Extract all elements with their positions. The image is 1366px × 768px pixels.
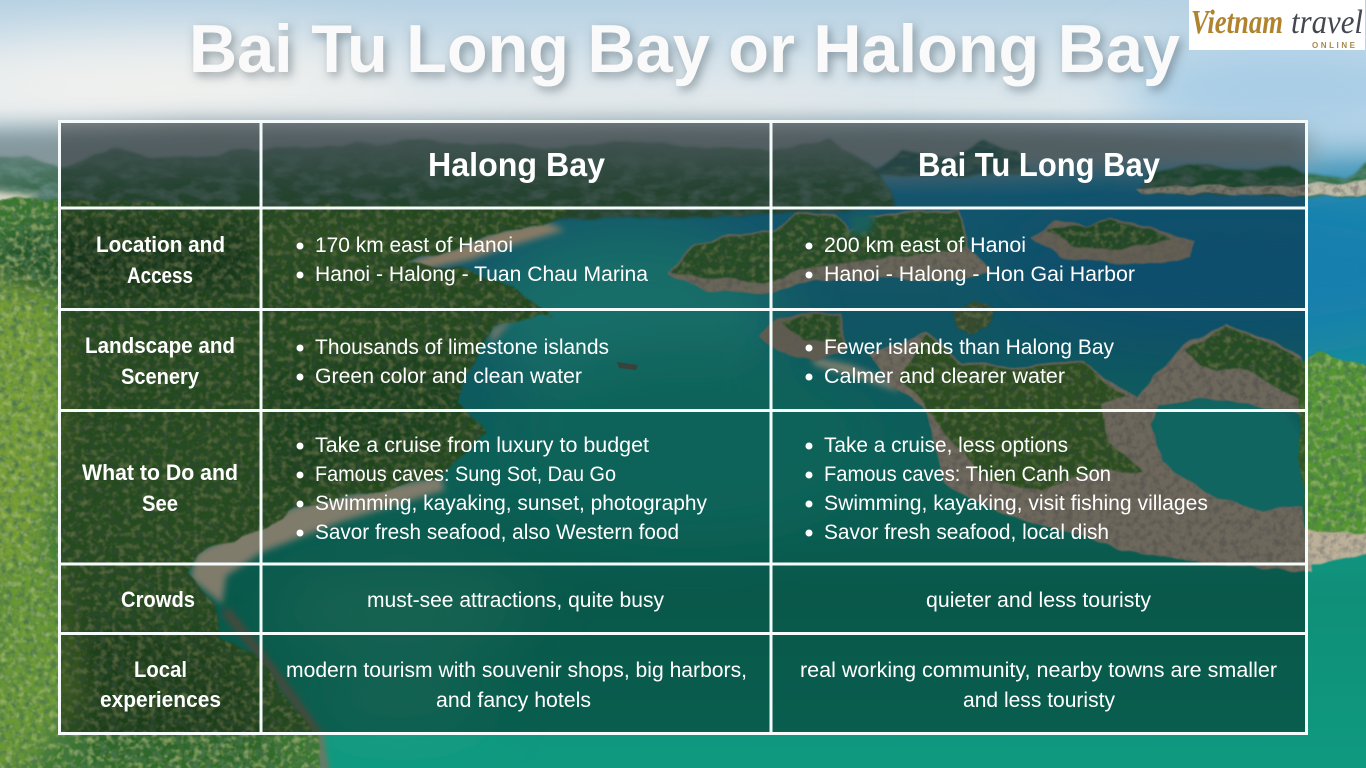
row: Local experiences: experiences [100,687,221,712]
far mountains [0,138,896,218]
table panel overlay [58,120,1308,735]
column heading: Bai Tu Long Bay: Bai Tu Long Bay [918,146,1161,183]
central islands: forest tops [672,212,1172,342]
row: Local experiences: and fancy hotels [436,689,591,712]
beaches [190,222,900,604]
row: Location and Access [96,232,1135,288]
row: Local experiences [100,657,1277,712]
row: Crowds: Crowds [121,587,195,612]
row: Local experiences: Local [134,657,187,682]
row: Location and Access: 170 km east of Hanoi [315,234,513,257]
row: What to Do and See: Swimming, kayaking, visit fishing villages [824,492,1208,515]
row: Location and Access: 200 km east of Hanoi [824,234,1026,257]
logo: Vietnam travel online: Vietnam [1191,4,1283,41]
distant hazy ridge [0,122,1310,190]
row: Crowds: quieter and less touristy [926,589,1151,612]
row: What to Do and See: Famous caves: Thien Canh Son [824,463,1111,486]
small bay inside the central island [850,213,875,236]
row: Landscape and Scenery: Scenery [121,364,200,389]
logo: Vietnam travel online [1189,0,1365,50]
lagoon [1150,395,1310,515]
row: Landscape and Scenery: Thousands of limestone islands [315,336,609,359]
row: Location and Access: Hanoi - Halong - Hon Gai Harbor [824,263,1135,286]
row: What to Do and See: Savor fresh seafood, local dish [824,521,1109,544]
row: Landscape and Scenery: Fewer islands than Halong Bay [824,336,1114,359]
row: Local experiences: and less touristy [963,689,1115,712]
logo: Vietnam travel online: ONLINE [1312,41,1356,50]
row: Location and Access: Access [127,263,193,288]
row: Location and Access: Hanoi - Halong - Tuan Chau Marina [315,263,648,286]
row: What to Do and See: Take a cruise from luxury to budget [315,434,649,457]
rocky arc island with lagoon [866,323,1312,572]
boats [617,362,638,370]
right headland [1298,353,1366,558]
distant islands in the header [870,143,1366,196]
column heading: Halong Bay: Halong Bay [428,146,606,183]
row: What to Do and See: Famous caves: Sung Sot, Dau Go [315,463,616,486]
row: What to Do and See: Savor fresh seafood, also Western food [315,521,679,544]
main left headland with tonal patches [0,190,580,768]
title: Bai Tu Long Bay or Halong Bay [189,11,1180,87]
row: What to Do and See: See [142,491,178,516]
row: Location and Access: Location and [96,232,225,257]
row: What to Do and See: Take a cruise, less options [824,434,1068,457]
row: Landscape and Scenery: Green color and clean water [315,365,582,388]
river at far left [0,190,40,228]
rocky shoreline lower left [225,610,325,768]
row: Landscape and Scenery [85,333,1114,389]
row: What to Do and See: What to Do and [82,460,238,485]
row: Local experiences: real working community, nearby towns are smaller [800,659,1277,682]
central islands: rock bases [668,210,1193,360]
row: What to Do and See [82,434,1208,544]
row: Crowds: must-see attractions, quite busy [367,589,664,612]
row: Local experiences: modern tourism with souvenir shops, big harbors, [286,659,747,682]
row: Crowds [121,587,1151,612]
row: Landscape and Scenery: Landscape and [85,333,235,358]
arc island forest [900,325,1303,490]
row: What to Do and See: Swimming, kayaking, sunset, photography [315,492,707,515]
row: Landscape and Scenery: Calmer and clearer water [824,365,1065,388]
